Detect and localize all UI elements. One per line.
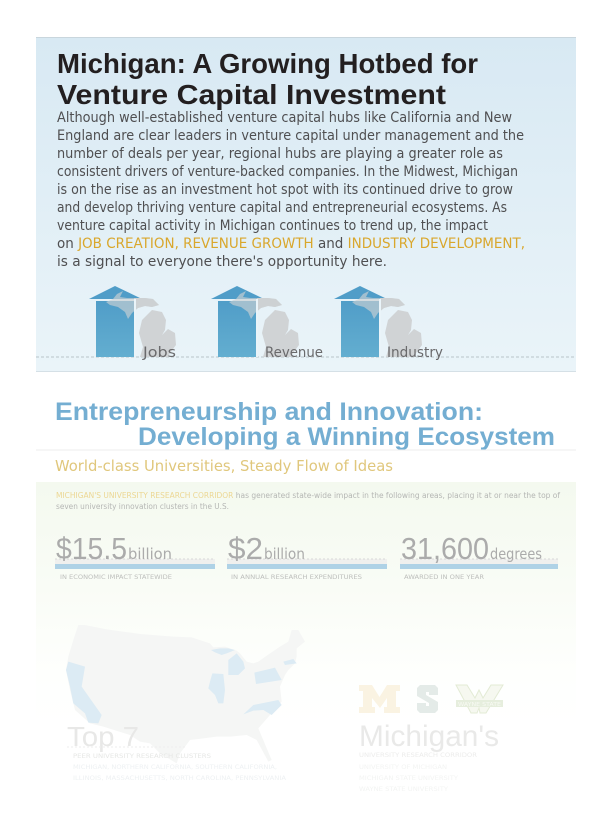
text block: Michigan's: UNIVERSITY RESEARCH CORRIDOR [359, 751, 478, 759]
map: United States [66, 625, 305, 763]
text block: Michigan's: UNIVERSITY OF MICHIGAN [359, 763, 447, 771]
stat: economic impact: billion [128, 545, 172, 563]
logos: universities [359, 685, 503, 713]
Pennsylvania [254, 668, 282, 684]
text block: Top 7: MICHIGAN, NORTHERN CALIFORNIA, SOUTHERN CALIFORNIA, [73, 763, 277, 771]
icon: Industry building [334, 286, 443, 361]
panel: research corridor [36, 482, 576, 830]
North Carolina [243, 700, 282, 715]
stat: research expenditures: IN ANNUAL RESEARCH EXPENDITURES [231, 573, 362, 581]
intro text block: England are clear leaders in venture capital under management and the [57, 128, 524, 144]
text block: corridor intro: seven university innovation clusters in the U.S. [56, 502, 229, 511]
stat: research expenditures [227, 531, 387, 581]
text block: corridor intro [56, 491, 560, 511]
heading: Entrepreneurship and Innovation [55, 398, 555, 451]
text block: Michigan's: Michigan's [359, 720, 499, 753]
stat: research expenditures: $2 [228, 531, 263, 566]
logo: block M [359, 685, 400, 713]
intro text block: number of deals per year, regional hubs are playing a greater role as [57, 146, 503, 162]
text block: corridor intro: MICHIGAN'S UNIVERSITY RESEARCH CORRIDOR has generated state-wide impact in the following areas, placing it at or near the top of [56, 491, 560, 500]
text block: Top 7: PEER UNIVERSITY RESEARCH CLUSTERS [73, 752, 211, 760]
stat: economic impact [55, 531, 215, 581]
logo: Wayne State W [456, 685, 503, 713]
intro text block: and develop thriving venture capital and entrepreneurial ecosystems. As [57, 200, 507, 216]
Massachusetts [283, 659, 297, 665]
logo: Wayne State W: WAYNE STATE [458, 702, 501, 708]
intro text block: venture capital activity in Michigan continues to trend up, the impact [57, 218, 488, 234]
subheading: World-class Universities, Steady Flow of Ideas [55, 457, 393, 475]
text block: Michigan's: MICHIGAN STATE UNIVERSITY [359, 774, 458, 782]
stat: research expenditures: billion [264, 545, 305, 563]
icon: Jobs building [89, 286, 176, 361]
intro text block: consistent drivers of venture-backed companies. In the Midwest, Michigan [57, 164, 518, 180]
intro text block: is a signal to everyone there's opportunity here. [57, 254, 387, 270]
icon: Revenue building [211, 286, 323, 361]
stat: degrees: AWARDED IN ONE YEAR [404, 573, 484, 581]
heading: Entrepreneurship and Innovation: Developing a Winning Ecosystem [138, 423, 555, 451]
California [66, 662, 102, 723]
label: Jobs: Jobs [142, 345, 176, 361]
label: Revenue: Revenue [265, 345, 323, 361]
text block: Top 7 [67, 721, 287, 782]
stat: economic impact: IN ECONOMIC IMPACT STATEWIDE [60, 573, 172, 581]
intro text block: Although well-established venture capital hubs like California and New [57, 110, 512, 126]
heading: Entrepreneurship and Innovation: Entrepreneurship and Innovation: [55, 398, 483, 426]
text block: Michigan's [359, 720, 499, 793]
stat: degrees: 31,600 [401, 531, 489, 566]
title: Michigan: A Growing Hotbed for [57, 48, 478, 79]
logo: block S [417, 685, 438, 713]
intro text block [57, 110, 525, 270]
Illinois [208, 673, 225, 703]
text block: Top 7: ILLINOIS, MASSACHUSETTS, NORTH CAROLINA, PENNSYLVANIA [73, 774, 287, 782]
panel: Michigan venture capital [36, 37, 576, 372]
stat: degrees: degrees [490, 545, 542, 563]
label: Industry: Industry [387, 345, 443, 361]
intro text block: is on the rise as an investment hot spot with its continued drive to grow [57, 182, 513, 198]
stat: degrees [400, 531, 558, 581]
text block: Top 7: Top 7 [67, 721, 139, 752]
title: Venture Capital Investment [57, 79, 446, 110]
intro text block: on JOB CREATION, REVENUE GROWTH and INDUSTRY DEVELOPMENT, [57, 236, 525, 252]
title [57, 48, 478, 110]
stat: economic impact: $15.5 [56, 531, 127, 566]
text block: Michigan's: WAYNE STATE UNIVERSITY [359, 785, 448, 793]
Michigan [211, 648, 245, 675]
